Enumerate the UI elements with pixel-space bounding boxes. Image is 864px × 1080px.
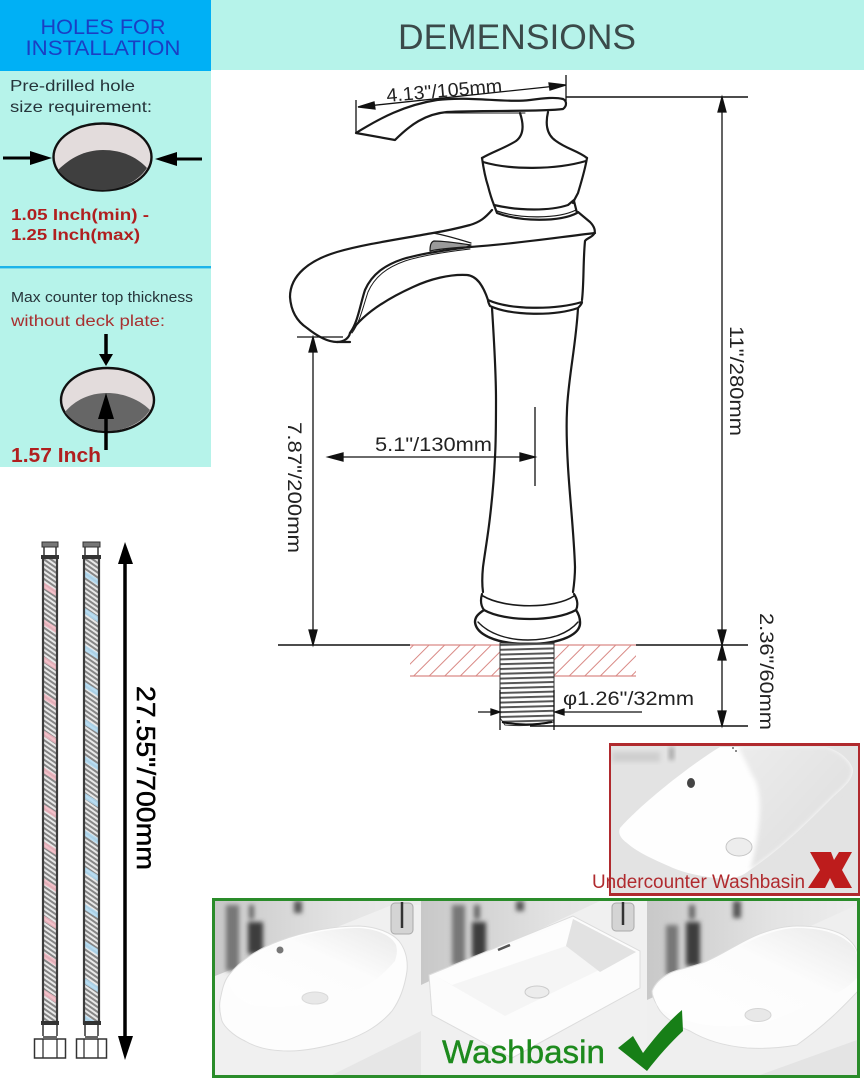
text: hole size range: 1.05 Inch(min) - xyxy=(11,207,149,224)
text: pre-drilled hole requirement: size requirement: xyxy=(10,99,152,116)
label: washbasin: Washbasin xyxy=(442,1034,605,1070)
icon: pre-drilled hole with arrows xyxy=(3,124,202,190)
handle neck and cap xyxy=(482,112,587,158)
panel heading xyxy=(0,0,211,71)
height arrow: 7.87in: 7.87"/200mm xyxy=(283,422,304,553)
icon: counter thickness hole with arrows xyxy=(61,334,154,450)
panel: undercounter washbasin (not suitable) xyxy=(592,744,858,894)
hose: hot xyxy=(34,542,66,1058)
height arrow: 7.87in xyxy=(283,337,343,645)
text: hole size range: 1.25 Inch(max) xyxy=(11,227,140,244)
thread diameter arrow: 1.26in: φ1.26"/32mm xyxy=(563,689,694,710)
spout body xyxy=(290,210,492,342)
panel heading: HOLES FOR xyxy=(40,16,166,39)
counter hatch section xyxy=(410,645,636,676)
text: hole size range xyxy=(11,207,149,244)
height arrow: 2.36in: 2.36"/60mm xyxy=(755,613,776,730)
thread diameter arrow: 1.26in xyxy=(478,689,694,730)
photo: rectangular vessel basin xyxy=(421,901,647,1075)
width arrow: 4.13in: 4.13"/105mm xyxy=(386,76,503,107)
icon: red X xyxy=(808,852,852,888)
height arrow: 2.36in xyxy=(530,613,776,730)
panel heading: INSTALLATION xyxy=(26,37,180,60)
width arrow: 4.13in xyxy=(356,75,748,133)
hose: cold xyxy=(76,542,106,1058)
header band: dimensions xyxy=(211,0,864,70)
dimension lines xyxy=(278,75,776,730)
heading: dimensions: DEMENSIONS xyxy=(398,18,636,57)
photo: undercounter basin xyxy=(611,746,858,893)
label: undercounter washbasin: Undercounter Washbasin xyxy=(592,872,805,893)
text: without deck plate: without deck plate: xyxy=(10,313,165,330)
panel: holes for installation xyxy=(0,0,211,467)
hose length arrow xyxy=(118,542,133,1060)
icon: green check xyxy=(618,1010,683,1071)
photo: slipper vessel basin xyxy=(647,901,858,1075)
base rings xyxy=(481,594,577,619)
hose length label: 27.55"/700mm xyxy=(131,686,161,870)
text: pre-drilled hole requirement: Pre-drilled hole xyxy=(10,78,135,95)
column xyxy=(482,308,496,592)
threaded tailpiece xyxy=(500,643,554,726)
text: 1.57 inch: 1.57 Inch xyxy=(11,445,101,467)
height arrow: 11in xyxy=(718,97,746,645)
hoses xyxy=(34,542,161,1060)
reach arrow: 5.1in: 5.1"/130mm xyxy=(375,435,492,456)
collar xyxy=(488,300,582,314)
handle lever xyxy=(356,98,566,140)
text: max counter top thickness: Max counter top thickness xyxy=(11,290,193,306)
panel: compatible washbasins xyxy=(214,900,858,1076)
aerator slot xyxy=(430,241,471,251)
text: pre-drilled hole requirement xyxy=(10,78,152,116)
counter surface line xyxy=(278,644,748,646)
height arrow: 11in: 11"/280mm xyxy=(725,326,746,436)
photo: oval vessel basin xyxy=(215,901,421,1075)
reach arrow: 5.1in xyxy=(328,407,535,486)
faucet line drawing xyxy=(290,98,595,644)
